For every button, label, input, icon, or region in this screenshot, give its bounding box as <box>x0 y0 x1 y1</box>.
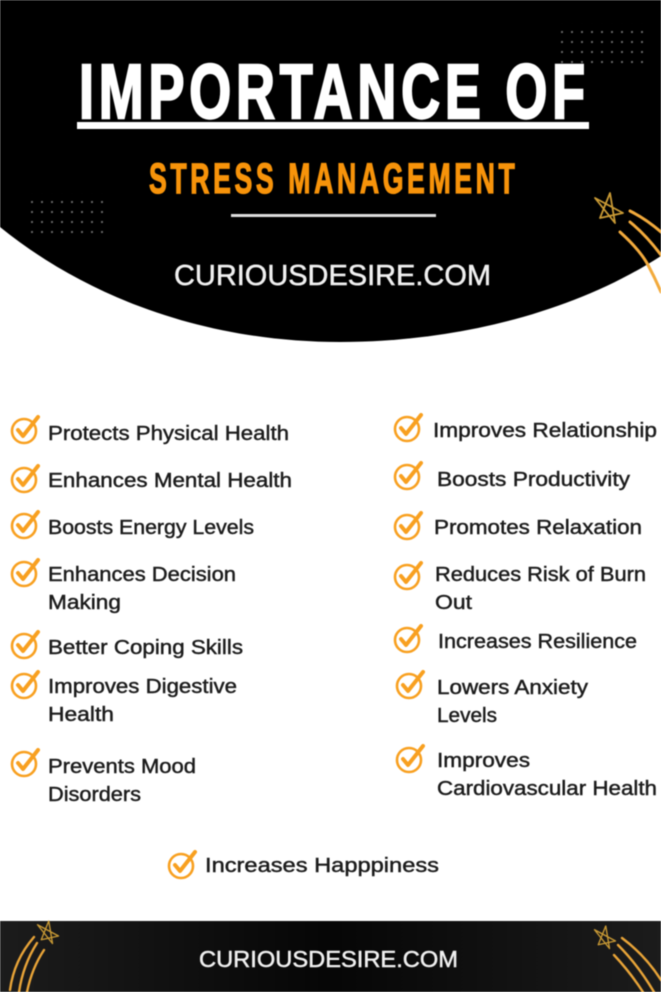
item: improves relationship: Improves Relationship <box>433 420 657 442</box>
item: enhances mental health <box>12 466 292 492</box>
header black curved background <box>0 0 661 342</box>
item: lowers anxiety levels <box>397 672 588 727</box>
icon: shooting star top right <box>595 193 661 292</box>
item: improves cardiovascular health: Improves <box>437 750 530 772</box>
website label: CURIOUSDESIRE.COM <box>174 260 491 292</box>
item: reduces risk of burn out: Reduces Risk of Burn <box>435 564 646 586</box>
item: boosts productivity: Boosts Productivity <box>437 469 630 491</box>
item: boosts productivity <box>395 463 630 491</box>
item: improves digestive health: Health <box>48 704 114 726</box>
item: reduces risk of burn out <box>395 563 646 614</box>
icon: shooting star footer right <box>594 926 661 992</box>
title underline <box>77 122 589 129</box>
item: increases happpiness <box>169 852 439 878</box>
footer bar <box>0 921 661 992</box>
item: enhances decision making <box>12 560 236 614</box>
subtitle divider <box>231 214 436 217</box>
item: increases happpiness: Increases Happpiness <box>205 855 439 877</box>
dot pattern top right <box>561 23 645 69</box>
dot pattern left <box>24 193 104 237</box>
item: lowers anxiety levels: Levels <box>437 705 497 727</box>
item: enhances mental health: Enhances Mental Health <box>48 470 292 492</box>
checklist right column <box>395 415 657 800</box>
footer website label: CURIOUSDESIRE.COM <box>199 946 458 972</box>
item: improves digestive health: Improves Digestive <box>48 676 237 698</box>
item: prevents mood disorders: Disorders <box>48 784 141 806</box>
checklist left column <box>12 417 292 806</box>
item: promotes relaxation <box>395 513 642 539</box>
item: promotes relaxation: Promotes Relaxation <box>434 517 642 539</box>
icon: shooting star footer left <box>10 921 58 992</box>
item: enhances decision making: Making <box>48 592 121 614</box>
item: improves cardiovascular health: Cardiovascular Health <box>437 778 657 800</box>
item: reduces risk of burn out: Out <box>435 592 472 614</box>
subtitle: STRESS MANAGEMENT <box>149 155 515 203</box>
item: boosts energy levels: Boosts Energy Levels <box>48 517 254 539</box>
item: enhances decision making: Enhances Decision <box>48 564 236 586</box>
item: better coping skills <box>12 632 243 659</box>
item: improves digestive health <box>12 672 237 726</box>
item: boosts energy levels <box>12 512 254 539</box>
item: protects physical health <box>12 417 289 445</box>
item: improves cardiovascular health <box>397 746 657 800</box>
item: prevents mood disorders <box>12 750 196 806</box>
item: prevents mood disorders: Prevents Mood <box>48 756 196 778</box>
item: protects physical health: Protects Physical Health <box>48 423 289 445</box>
item: improves relationship <box>395 415 657 442</box>
item: better coping skills: Better Coping Skills <box>48 637 243 659</box>
item: increases resilience <box>395 626 637 653</box>
item: increases resilience: Increases Resilience <box>438 631 637 653</box>
title: IMPORTANCE OF <box>79 50 585 135</box>
item: lowers anxiety levels: Lowers Anxiety <box>437 677 588 699</box>
